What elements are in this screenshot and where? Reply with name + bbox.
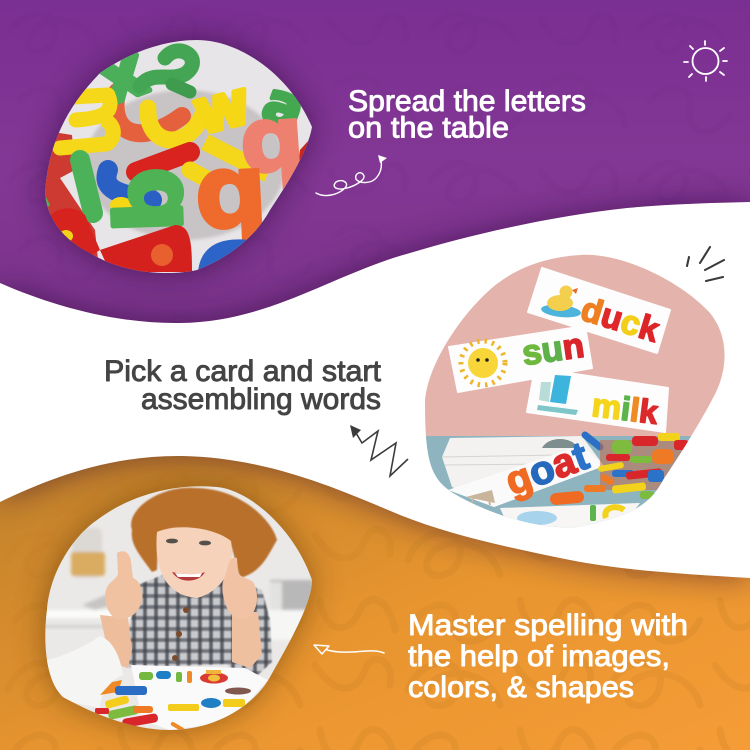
card: milk: milk [590, 386, 661, 430]
icon: sun [684, 41, 727, 81]
photo: wooden letters spread on table: a [254, 67, 314, 145]
heading: spread the letters: Spread the letters [348, 85, 586, 118]
photo: wooden letters spread on table: q [191, 131, 271, 253]
heading: master spelling: Master spelling with [408, 609, 688, 642]
card: goat [466, 443, 592, 506]
photo: wooden letters spread on table: b [96, 166, 204, 234]
heading: master spelling: colors, & shapes [408, 671, 634, 704]
photo shadow bottom [45, 486, 312, 730]
white band shadow [0, 202, 750, 578]
loose letter pile [550, 433, 688, 505]
card: sun: sun [519, 325, 587, 373]
card: milk [527, 368, 668, 432]
card letters [139, 670, 251, 732]
orange bottom band [0, 440, 750, 750]
heading: master spelling [408, 609, 688, 704]
heading: spread the letters [348, 85, 586, 144]
arms [100, 615, 132, 668]
face [156, 527, 232, 598]
arrow: curved to photo [314, 645, 384, 654]
arrow: zigzag [350, 425, 408, 476]
photo: wooden letters spread on table: x [88, 31, 156, 121]
photo: smiling boy with thumbs up [40, 480, 320, 735]
photo: wooden letters spread on table: q [236, 85, 308, 195]
card: sun [449, 325, 592, 392]
arrow: looping swirl [316, 155, 387, 195]
burst lines [687, 247, 724, 281]
purple top band [0, 0, 750, 340]
heading: pick a card: assembling words [141, 383, 381, 416]
pile of letters [95, 680, 159, 728]
hair [131, 488, 277, 578]
yellow 3 [60, 95, 113, 148]
photo: wooden letters spread on table [45, 40, 312, 273]
right thumbs-up hand [222, 558, 257, 619]
shirt buttons [172, 607, 189, 661]
photo: wooden letters spread on table: w [187, 67, 257, 149]
white middle band [0, 202, 750, 578]
card: duck: duck [576, 290, 664, 350]
heading: pick a card [104, 355, 381, 416]
spelling cards on table [131, 665, 268, 730]
heading: pick a card: Pick a card and start [104, 355, 381, 388]
white cloth [45, 636, 123, 708]
photo shadow top [45, 40, 312, 273]
card stack [442, 436, 604, 507]
plaid shirt [122, 574, 272, 682]
photo: word cards on pink table [420, 250, 730, 536]
left thumbs-up hand [105, 551, 142, 619]
heading: spread the letters: on the table [348, 112, 509, 144]
heading: master spelling: the help of images, [408, 640, 670, 673]
bottom card [500, 503, 640, 530]
card: goat: goat [500, 434, 594, 504]
kitchen background [40, 528, 315, 640]
card: duck [528, 268, 670, 353]
